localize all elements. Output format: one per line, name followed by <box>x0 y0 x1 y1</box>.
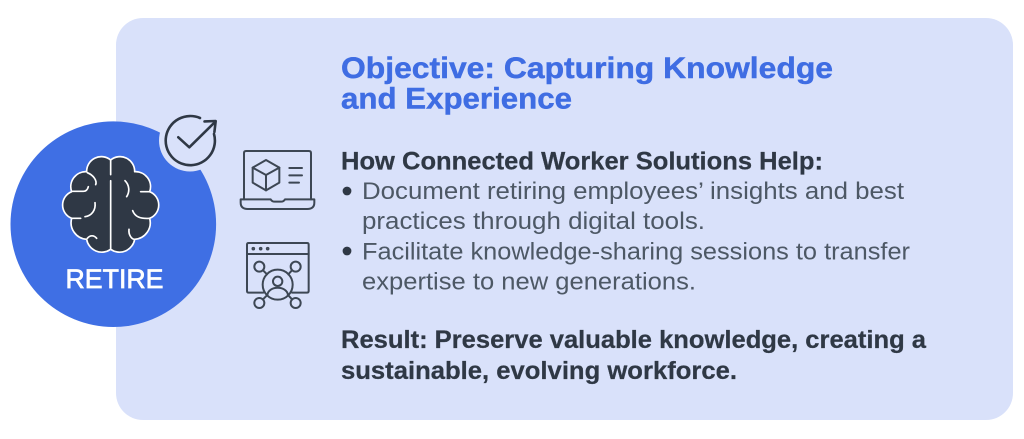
bullet: document insights: Document retiring employees’ insights and best <box>362 178 904 205</box>
icon: browser window with connected user <box>247 243 309 308</box>
icon: check badge with arrow <box>159 110 221 172</box>
bullet: document insights <box>343 178 904 235</box>
bullet: knowledge sharing: expertise to new generations. <box>362 268 696 296</box>
heading: objective <box>341 52 833 116</box>
heading: objective: and Experience <box>341 82 572 116</box>
result statement: sustainable, evolving workforce. <box>341 357 737 385</box>
result statement: Result: Preserve valuable knowledge, creating a <box>341 326 927 354</box>
label: retire: RETIRE <box>66 264 164 294</box>
badge: retire circle <box>10 121 216 327</box>
result statement <box>341 326 927 385</box>
bullet: document insights: practices through digital tools. <box>362 208 705 235</box>
icon: brain <box>63 157 159 252</box>
heading: objective: Objective: Capturing Knowledge <box>341 52 833 85</box>
bullet: knowledge sharing <box>343 238 910 296</box>
icon: laptop with cube <box>241 151 314 209</box>
subheading: how solutions help: How Connected Worker Solutions Help: <box>341 148 823 176</box>
bullet: knowledge sharing: Facilitate knowledge-sharing sessions to transfer <box>362 238 910 266</box>
